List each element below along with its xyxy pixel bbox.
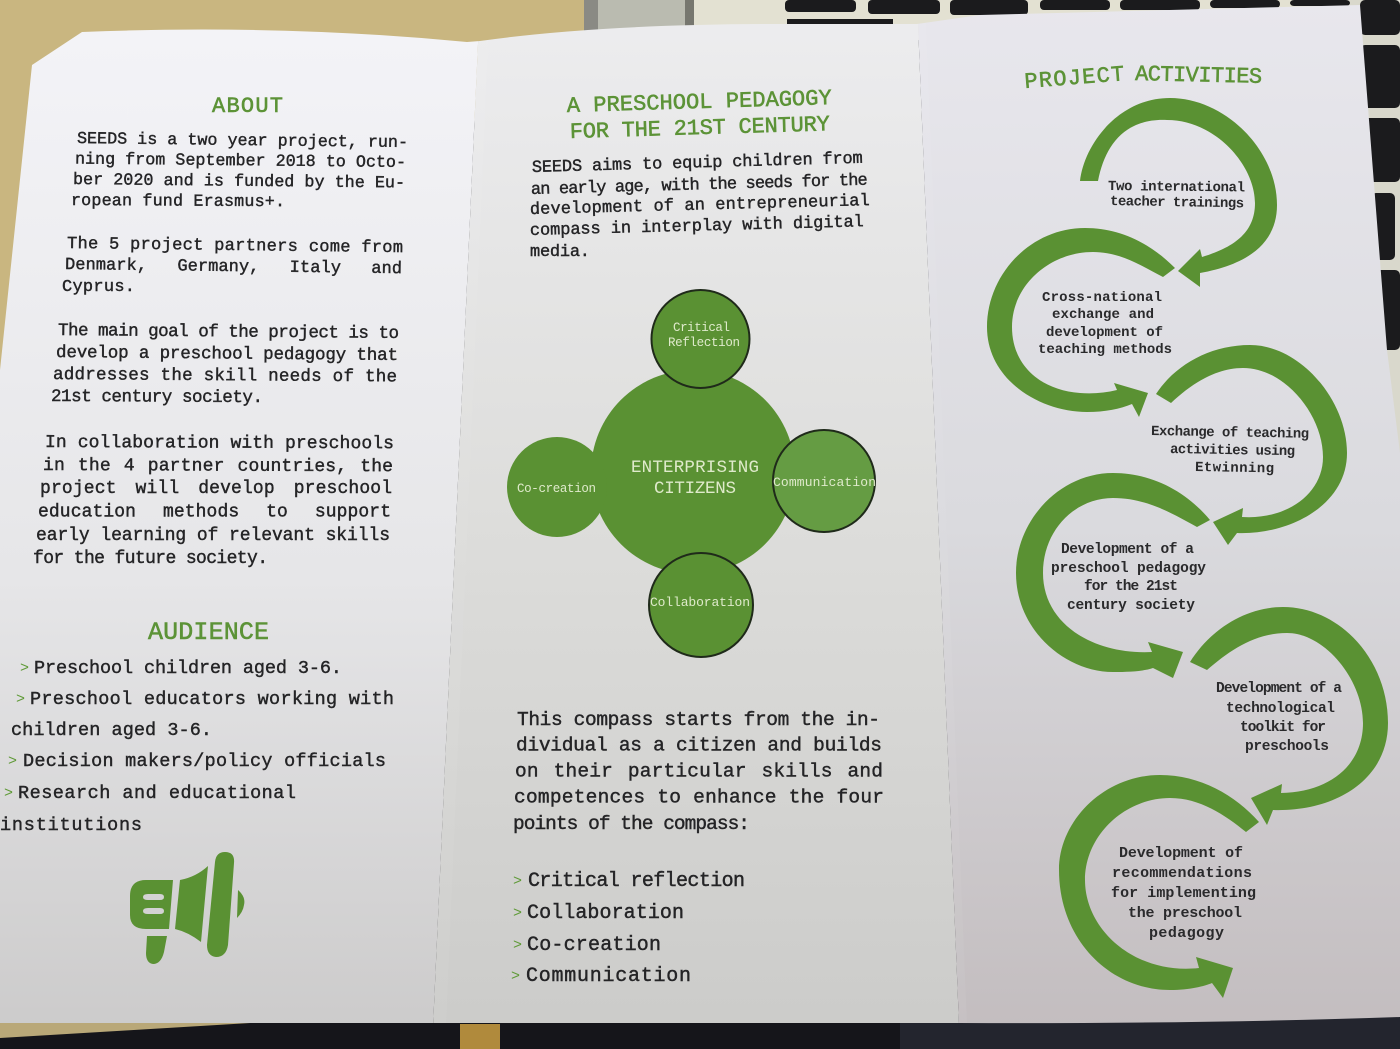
- heading: project activities: ACTIVITIES: [1135, 62, 1262, 90]
- text block: pedagogy intro: media.: [530, 243, 590, 262]
- heading: audience: AUDIENCE: [148, 618, 269, 647]
- text block: about paragraph 4: for the future society.: [33, 549, 268, 569]
- text block: pedagogy intro: an early age, with the seeds for the: [531, 172, 868, 200]
- arrow 5: technological toolkit: technological: [1226, 701, 1335, 717]
- list: audience: >: [20, 660, 29, 677]
- text block: about paragraph 4: education methods to support: [38, 502, 391, 522]
- list: compass points: >: [511, 968, 520, 985]
- panel: preschool pedagogy: [507, 86, 884, 988]
- circle: critical reflection: [652, 290, 750, 388]
- arrow 3: exchange of teaching activities: [1151, 345, 1347, 545]
- text block: about paragraph 3: The main goal of the project is to: [58, 321, 399, 344]
- list: audience: children aged 3-6.: [11, 720, 212, 741]
- text block: about paragraph 4: early learning of relevant skills: [36, 526, 390, 546]
- text block: compass description: points of the compass:: [513, 813, 750, 835]
- text block: about paragraph 4: project will develop preschool: [40, 479, 392, 499]
- list: audience: Decision makers/policy officials: [23, 751, 386, 772]
- circle: enterprising citizens: [591, 370, 795, 574]
- arrow 1: teacher trainings: Two international: [1108, 179, 1245, 196]
- arrow 2: cross-national exchange: development of: [1046, 325, 1163, 341]
- panel: about and audience: [0, 94, 408, 964]
- arrow 1: teacher trainings: [1080, 98, 1277, 287]
- text block: about paragraph 1: ropean fund Erasmus+.: [71, 192, 285, 212]
- text block: about paragraph 2: Denmark, Germany, Italy and: [65, 256, 402, 279]
- list: compass points: [511, 870, 745, 988]
- list: compass points: Collaboration: [527, 902, 684, 925]
- heading: about: ABOUT: [212, 94, 283, 119]
- text block: about paragraph 1: [71, 130, 408, 212]
- arrow 2: cross-national exchange: teaching methods: [1038, 342, 1172, 358]
- arrow 4: preschool pedagogy development: Development of a: [1061, 542, 1194, 558]
- list: audience: Preschool children aged 3-6.: [34, 658, 342, 679]
- list: audience: Research and educational: [18, 783, 296, 804]
- arrow 2: cross-national exchange: exchange and: [1052, 307, 1154, 323]
- circle: co-creation: [507, 437, 607, 537]
- circle: collaboration: Collaboration: [650, 595, 750, 610]
- circle: collaboration: [649, 553, 753, 657]
- list: compass points: Critical reflection: [528, 870, 745, 893]
- text block: about paragraph 4: In collaboration with preschools: [45, 433, 394, 454]
- list: audience: >: [8, 753, 17, 770]
- list: compass points: >: [513, 873, 522, 890]
- text block: about paragraph 1: SEEDS is a two year project, run-: [77, 130, 408, 153]
- arrow 6: recommendations: recommendations: [1112, 865, 1252, 882]
- arrow 5: technological toolkit: [1190, 607, 1388, 825]
- list: audience: Preschool educators working with: [30, 689, 394, 710]
- panel: project activities: [987, 62, 1388, 998]
- list: audience: >: [4, 785, 13, 802]
- arrow 4: preschool pedagogy development: preschool pedagogy: [1051, 561, 1206, 577]
- text block: pedagogy intro: [530, 150, 870, 262]
- circle: communication: Communication: [773, 475, 876, 490]
- text block: about paragraph 2: Cyprus.: [62, 278, 135, 297]
- arrow 5: technological toolkit: Development of a: [1216, 681, 1342, 697]
- icon: megaphone: [130, 852, 244, 964]
- arrow 1: teacher trainings: teacher trainings: [1110, 194, 1244, 212]
- circle: critical reflection: Critical: [673, 321, 730, 335]
- list: audience: institutions: [0, 815, 142, 836]
- text block: about paragraph 4: [33, 433, 394, 569]
- heading: pedagogy: A PRESCHOOL PEDAGOGY: [566, 86, 832, 119]
- text block: compass description: dividual as a citizen and builds: [516, 734, 882, 756]
- circle: communication: [773, 430, 876, 532]
- arrow 6: recommendations: the preschool: [1128, 905, 1242, 922]
- arrow 4: preschool pedagogy development: [1016, 473, 1210, 678]
- arrow 2: cross-national exchange: [987, 228, 1175, 417]
- list: compass points: >: [513, 937, 522, 954]
- text block: compass description: on their particular skills and: [515, 760, 883, 782]
- heading: pedagogy: FOR THE 21ST CENTURY: [569, 112, 830, 145]
- circle: enterprising citizens: CITIZENS: [654, 479, 736, 499]
- arrow 3: exchange of teaching activities: Etwinning: [1195, 460, 1274, 477]
- text block: about paragraph 3: 21st century society.: [51, 387, 263, 408]
- text block: about paragraph 2: [62, 235, 403, 297]
- list: audience: [0, 658, 394, 836]
- circle: co-creation: Co-creation: [517, 482, 596, 496]
- arrow 4: preschool pedagogy development: century society: [1067, 598, 1195, 614]
- text block: compass description: competences to enhance the four: [514, 786, 884, 808]
- text block: pedagogy intro: compass in interplay with digital: [530, 213, 864, 241]
- arrow 4: preschool pedagogy development: for the 21st: [1084, 579, 1178, 595]
- text block: about paragraph 3: addresses the skill needs of the: [53, 365, 397, 387]
- text block: about paragraph 4: in the 4 partner countries, the: [43, 456, 393, 477]
- text block: compass description: This compass starts from the in-: [517, 709, 880, 731]
- text block: compass description: [513, 709, 884, 835]
- text block: about paragraph 2: The 5 project partners come from: [67, 235, 403, 258]
- text block: pedagogy intro: SEEDS aims to equip children from: [532, 150, 863, 178]
- list: compass points: >: [513, 905, 522, 922]
- heading: pedagogy: [566, 86, 832, 145]
- arrow 3: exchange of teaching activities: Exchange of teaching: [1151, 424, 1309, 443]
- heading: project activities: PROJECT: [1024, 62, 1125, 95]
- list: compass points: Co-creation: [527, 934, 661, 957]
- arrow 3: exchange of teaching activities: activities using: [1170, 442, 1295, 460]
- list: audience: >: [16, 691, 25, 708]
- text block: about paragraph 3: develop a preschool pedagogy that: [56, 343, 398, 366]
- arrow 5: technological toolkit: preschools: [1245, 739, 1329, 755]
- heading: project activities: [1024, 62, 1262, 95]
- text block: about paragraph 3: [51, 321, 399, 408]
- text block: about paragraph 1: ning from September 2018 to Octo-: [75, 151, 406, 173]
- circle: critical reflection: Reflection: [668, 336, 740, 350]
- circle: enterprising citizens: ENTERPRISING: [631, 458, 759, 478]
- arrow 5: technological toolkit: toolkit for: [1240, 720, 1326, 736]
- arrow 2: cross-national exchange: Cross-national: [1042, 290, 1162, 306]
- arrow 6: recommendations: Development of: [1119, 845, 1243, 862]
- text block: pedagogy intro: development of an entrepreneurial: [530, 192, 870, 220]
- list: compass points: Communication: [526, 965, 691, 988]
- chart: compass circles: [507, 290, 876, 657]
- arrow 6: recommendations: for implementing: [1111, 885, 1256, 902]
- text block: about paragraph 1: ber 2020 and is funded by the Eu-: [73, 171, 405, 193]
- arrow 6: recommendations: pedagogy: [1149, 925, 1224, 942]
- arrow 6: recommendations: [1059, 775, 1259, 998]
